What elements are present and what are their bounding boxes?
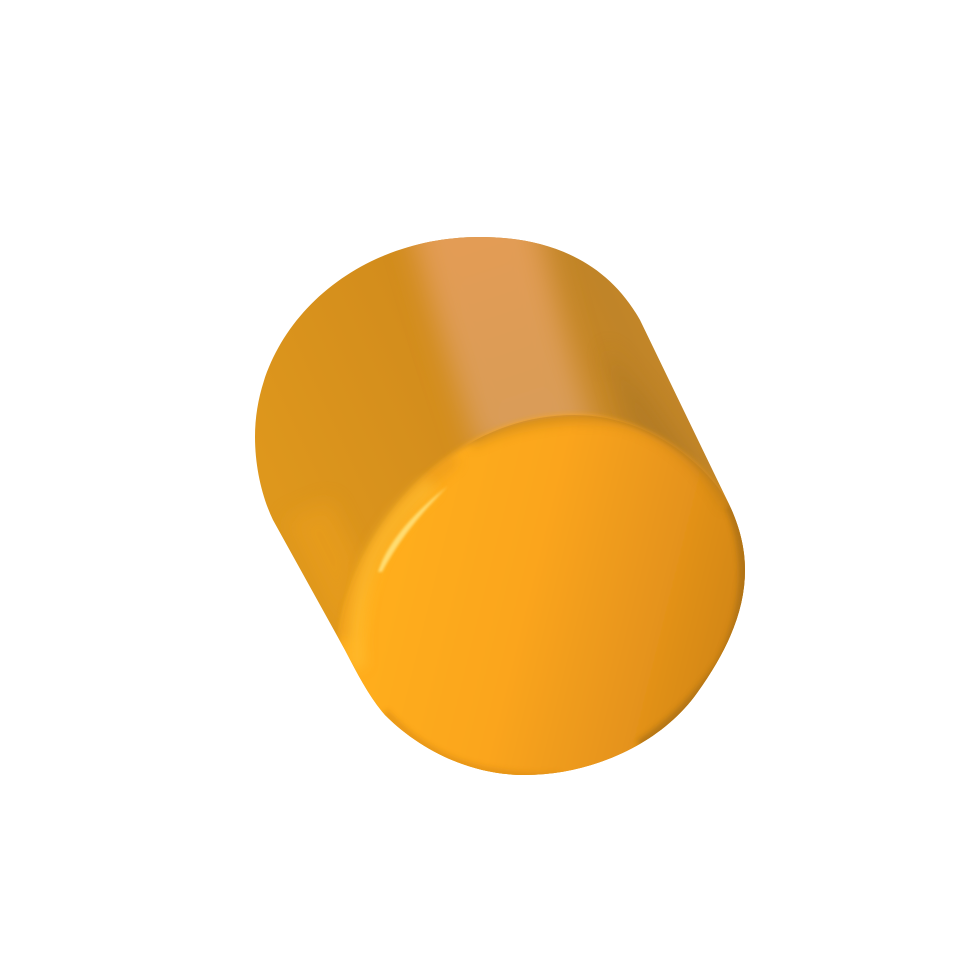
side highlight band [402, 237, 602, 444]
face inner shading [345, 414, 744, 776]
cylinder body [255, 237, 745, 775]
side shadow [617, 373, 679, 445]
cylinder front face [336, 412, 745, 775]
lower body glow [308, 520, 346, 620]
illustration: 3D orange cylinder [255, 237, 745, 775]
rim highlight [357, 484, 448, 668]
